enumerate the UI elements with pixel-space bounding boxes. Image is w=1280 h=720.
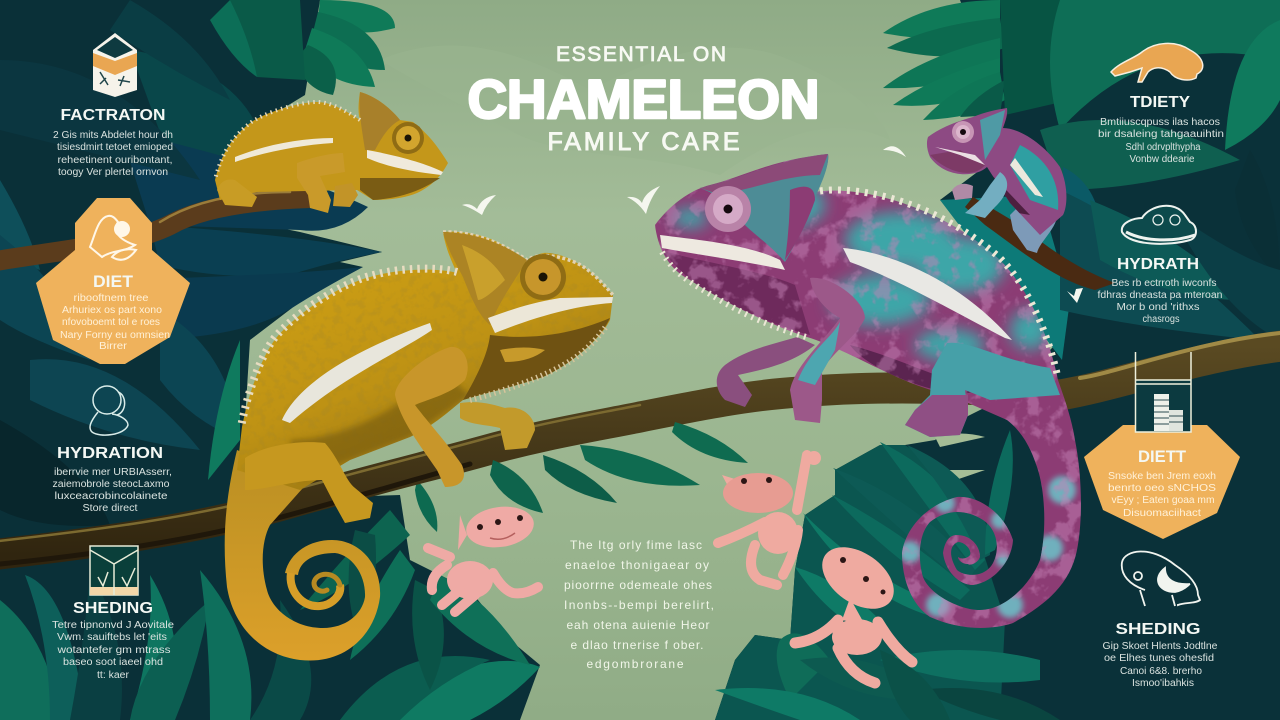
- casque: [443, 232, 527, 325]
- center text block: enaeloe thonigaear oy: [565, 558, 709, 572]
- title: [468, 43, 820, 156]
- front leg: [790, 278, 865, 423]
- heading: SHEDING: [73, 600, 153, 617]
- heading: HYDRATION: [57, 445, 163, 462]
- icon: box: [93, 33, 137, 97]
- front leg: [395, 347, 468, 487]
- panel: tdiety right: [1098, 43, 1224, 165]
- panel: hydration left: [52, 386, 172, 514]
- front leg teal band: [798, 322, 840, 385]
- icon: diet: [90, 216, 136, 260]
- baby chameleon: middle: [718, 451, 821, 585]
- icon: hydration: [90, 386, 128, 435]
- throat spikes: [662, 252, 810, 338]
- body text: Disuomaciihact: [1123, 508, 1201, 519]
- casque highlight: [462, 245, 505, 300]
- body text: 2 Gis mits Abdelet hour dh: [53, 130, 173, 141]
- hind leg: [245, 442, 373, 523]
- palm fronds lower left: [300, 510, 410, 610]
- body text: [52, 467, 172, 514]
- head crest: [443, 232, 613, 295]
- heading: SHEDING: [1116, 621, 1200, 638]
- center text block: e dlao trnerise f ober.: [570, 638, 704, 652]
- chameleon: large yellow: [225, 225, 620, 661]
- center text block: The Itg orly fime lasc: [570, 538, 702, 552]
- body text: [53, 130, 173, 178]
- left dark jungle: [0, 0, 540, 720]
- body text: Gip Skoet Hlents Jodtlne: [1102, 641, 1218, 652]
- panel: shedding right: [1102, 551, 1218, 689]
- icon: shell: [1122, 206, 1196, 244]
- right leaves: [883, 0, 1000, 38]
- title line 2: CHAMELEON: [468, 68, 820, 130]
- lower right palm backdrop: [715, 445, 1005, 720]
- throat spikes: [470, 325, 607, 400]
- branch: top left: [0, 192, 310, 262]
- baby chameleon: bottom right: [795, 535, 912, 683]
- icon: orange creature: [1111, 43, 1203, 82]
- chameleon: small yellow: [215, 92, 448, 213]
- body text: iberrvie mer URBIAsserr,: [54, 467, 172, 478]
- casque back: [785, 187, 815, 260]
- body text: nfovoboemt tol e roes: [62, 317, 160, 328]
- crest: [241, 269, 457, 427]
- icon: shedding: [90, 546, 138, 595]
- hexagon badge: [36, 198, 190, 364]
- tail spiral tip: [314, 574, 340, 591]
- body text: Store direct: [82, 503, 138, 514]
- body text: [1102, 641, 1218, 689]
- flank stripe: [282, 323, 432, 423]
- body: [237, 232, 613, 490]
- panel: diet left: [36, 198, 190, 364]
- body text: Bes rb ectrroth iwconfs: [1112, 278, 1216, 289]
- jaw stripe: [488, 297, 613, 333]
- baby chameleon: left: [428, 502, 538, 612]
- body text: Snsoke ben Jrem eoxh: [1108, 471, 1216, 482]
- left leaves: [318, 0, 395, 32]
- far leg: [717, 337, 815, 407]
- body text: chasrogs: [1142, 314, 1180, 325]
- body text: Bmtiiuscqpuss ilas hacos: [1100, 117, 1220, 128]
- heading: DIET: [93, 272, 134, 291]
- body: [655, 154, 1081, 628]
- body text: Arhuriex os part xono: [62, 305, 162, 316]
- panel: shedding left: [52, 546, 174, 681]
- branch: main: [0, 332, 1280, 564]
- center text block: Inonbs--bempi berelirt,: [564, 598, 714, 612]
- body text: tisiesdmirt tetoet emioped: [57, 142, 173, 153]
- body text: oe Elhes tunes ohesfid: [1104, 653, 1214, 664]
- body text: benrto oeo sNCHOS: [1108, 483, 1216, 494]
- body text: Mor b ond 'rithxs: [1116, 302, 1200, 313]
- icon: bird outline: [1122, 551, 1200, 606]
- branch: top right: [965, 197, 1115, 290]
- right dark jungle: [715, 0, 1280, 720]
- body text: toogy Ver plertel ornvon: [58, 167, 168, 178]
- body text: Tetre tipnonvd J Aovitale: [52, 620, 174, 631]
- panel: factration: [53, 33, 173, 178]
- title line 1: ESSENTIAL ON: [556, 43, 726, 66]
- far front leg: [460, 402, 535, 450]
- title line 3: FAMILY CARE: [548, 128, 740, 156]
- hexagon badge: [1084, 425, 1240, 539]
- tail spiral: [291, 573, 340, 606]
- body text: reheetinent ouribontant,: [58, 155, 172, 166]
- jaw stripe: [660, 235, 785, 270]
- center text block: pioorrne odemeale ohes: [564, 578, 712, 592]
- body text: ribooftnem tree: [74, 293, 149, 304]
- body text: tt: kaer: [97, 670, 130, 681]
- heading: FACTRATON: [60, 107, 166, 124]
- body text: fdhras dneasta pa mteroan: [1098, 290, 1222, 301]
- body text: [1098, 278, 1222, 325]
- leaflets on main branch: [490, 422, 748, 513]
- body text: bir dsaleing tahgaauihtin: [1098, 129, 1224, 140]
- casque: [700, 154, 828, 262]
- body text: Ismoo'ibahkis: [1132, 678, 1194, 689]
- icon: building: [1136, 352, 1191, 432]
- panel: hydrath right: [1098, 206, 1222, 325]
- eye: [705, 186, 751, 232]
- body text: Canoi 6&8. brerho: [1120, 666, 1202, 677]
- heading: TDIETY: [1130, 94, 1190, 111]
- flank stripe: [843, 248, 1012, 340]
- tail: [225, 450, 380, 661]
- chameleon: small purple: [927, 108, 1066, 253]
- heading: DIETT: [1138, 447, 1187, 466]
- sage gaps in right palm: [935, 434, 985, 482]
- body text: [1098, 117, 1224, 165]
- body text: Nary Forny eu omnsien: [60, 330, 170, 341]
- casque rim: [700, 154, 828, 193]
- teal leaf behind back: [940, 195, 1070, 360]
- body text: [1108, 471, 1216, 519]
- hind leg: [905, 343, 1060, 437]
- center text block: [564, 538, 714, 671]
- chameleon: large purple: [650, 150, 1090, 640]
- panel: diet right: [1084, 352, 1240, 539]
- body text: luxceacrobincolainete: [54, 491, 168, 502]
- center text block: eah otena auienie Heor: [566, 618, 710, 632]
- eye: [520, 254, 566, 300]
- cloud shapes: [380, 46, 890, 175]
- body text: [60, 293, 170, 352]
- center text block: edgombrorane: [586, 657, 684, 671]
- body text: vEyy ; Eaten goaa mm: [1112, 495, 1214, 506]
- body text: Birrer: [99, 341, 128, 352]
- body text: baseo soot iaeel ohd: [63, 657, 163, 668]
- birds: [462, 146, 1083, 303]
- body text: Sdhl odrvplthypha: [1126, 142, 1201, 153]
- body text: [52, 620, 174, 681]
- crest: [820, 190, 1058, 378]
- right palm fronds: [715, 430, 1060, 720]
- heading: HYDRATH: [1117, 256, 1199, 273]
- hind paw: [905, 395, 968, 437]
- body text: Vwm. sauiftebs let 'eits: [57, 632, 167, 643]
- body text: Vonbw ddearie: [1130, 154, 1195, 165]
- body text: wotantefer gm mtrass: [56, 645, 170, 656]
- body text: zaiemobrole steocLaxmo: [52, 479, 170, 490]
